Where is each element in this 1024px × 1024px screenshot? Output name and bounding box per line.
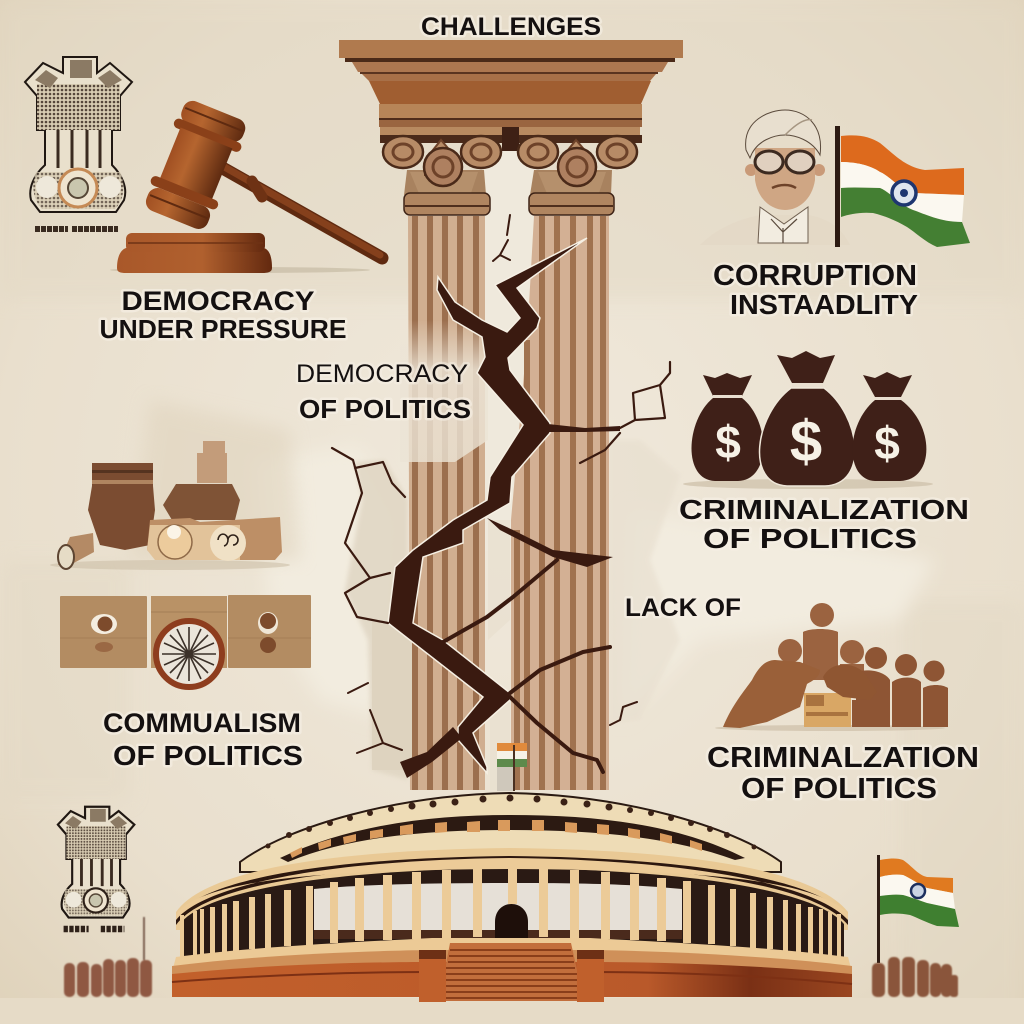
icon: national emblem [25,57,132,229]
small flag at pillar base [497,743,527,791]
parliament building [172,793,852,1002]
icon: crowd and hands [715,603,948,731]
panel: communalism [50,441,311,771]
icon: politician [700,110,850,245]
panel: democracy under pressure: UNDER PRESSURE [100,314,346,344]
panel: corruption [700,110,970,320]
crack branches [332,215,670,778]
icon: flag lower right [877,855,959,963]
heading: CORRUPTION [713,260,917,292]
panel: money bags: OF POLITICS [703,523,917,554]
icon: money bags: $ [715,416,741,468]
heading: COMMUALISM [103,708,301,738]
doorway [495,904,528,943]
gap between columns [484,151,536,551]
heading: CRIMINALIZATION [679,494,969,525]
icon: indian flag [835,126,970,247]
plaster patches [345,460,408,780]
inner wall [314,883,682,930]
panel: communalism: OF POLITICS [113,740,303,771]
columns [180,868,841,957]
icon: gavel [110,97,382,273]
icon: boxes with wheel [60,595,311,687]
icon: guards right [872,957,958,997]
icon: national emblem lower [58,807,134,929]
text: democracy of politics: OF POLITICS [299,394,471,424]
base tiers [172,938,852,972]
panel: people and hands [707,603,979,805]
icon: money bags: $ [790,409,822,474]
faded column section [400,320,488,462]
colonnade [180,868,844,962]
cracked pillars [332,40,683,790]
heading: CRIMINALZATION [707,742,979,774]
icon: money bags: $ [874,417,900,469]
panel: people and hands: OF POLITICS [741,773,937,805]
text: democracy of politics [296,360,471,424]
panel: money bags [679,351,969,554]
dome windows [280,815,745,862]
icon: money bags [683,351,933,489]
front stairs [439,943,584,1001]
left column [383,136,501,790]
dome dots [266,794,756,850]
panel: democracy under pressure [25,57,382,344]
heading: DEMOCRACY [122,286,314,316]
right column [511,136,637,790]
panel: corruption: INSTAADLITY [730,289,918,320]
text: lack of: LACK OF [625,594,741,622]
icon: pots and objects [50,441,290,570]
title: CHALLENGES [421,13,601,41]
icon: guards left [64,917,152,997]
capital entablature [339,40,683,151]
main crack [388,238,587,773]
dome roof [240,793,781,872]
text: democracy of politics: DEMOCRACY [296,360,468,388]
roof tiers [176,848,848,930]
